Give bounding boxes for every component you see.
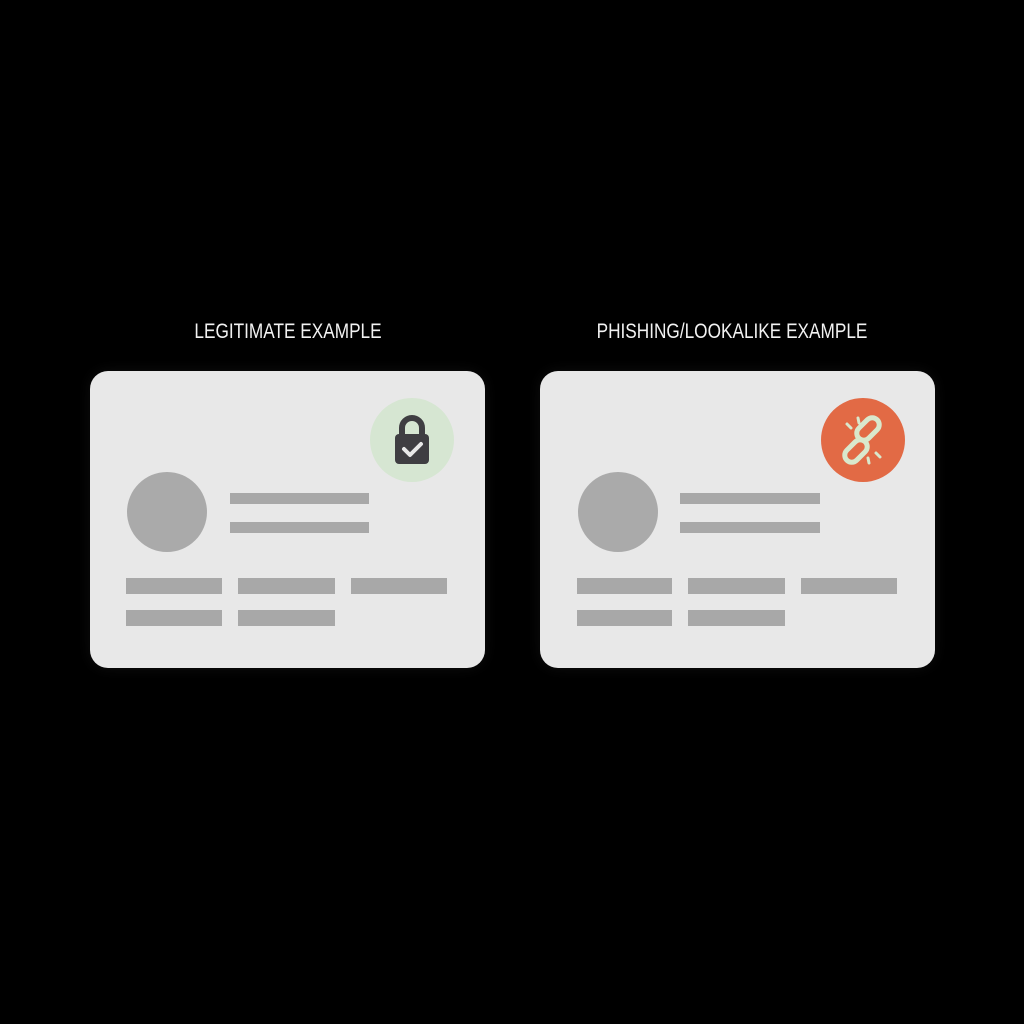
icon: lock with check	[370, 398, 454, 482]
panel: phishing card	[540, 371, 935, 668]
text lines	[126, 493, 447, 626]
avatar	[578, 472, 658, 552]
title: phishing: PHISHING/LOOKALIKE EXAMPLE	[597, 320, 867, 343]
avatar	[127, 472, 207, 552]
panel: legitimate card	[90, 371, 485, 668]
title: legitimate: LEGITIMATE EXAMPLE	[194, 320, 382, 343]
text lines	[577, 493, 897, 626]
icon: broken link	[821, 398, 905, 482]
